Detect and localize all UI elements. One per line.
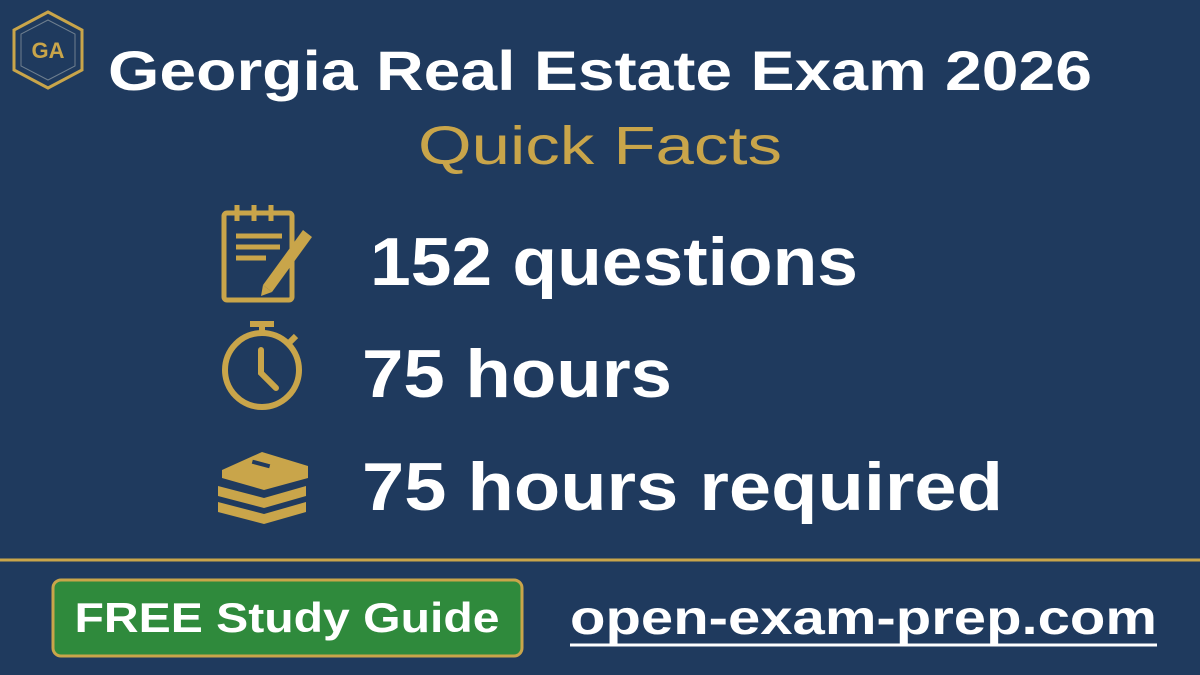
logo: GA hexagon <box>14 12 82 88</box>
title: Georgia Real Estate Exam 2026 <box>108 39 1092 102</box>
icon: books <box>218 452 308 524</box>
button: FREE Study Guide <box>53 580 522 656</box>
icon: stopwatch <box>225 324 299 407</box>
website link: open-exam-prep.com <box>570 592 1157 645</box>
logo: GA hexagon: GA <box>32 38 65 63</box>
icon: notepad with pencil <box>224 205 312 300</box>
button: FREE Study Guide: FREE Study Guide <box>74 594 500 641</box>
row 2 text: 75 hours <box>362 336 672 412</box>
subtitle: Quick Facts <box>418 116 782 176</box>
row 3 text: 75 hours required <box>362 449 1003 525</box>
row 1 text: 152 questions <box>370 224 858 300</box>
